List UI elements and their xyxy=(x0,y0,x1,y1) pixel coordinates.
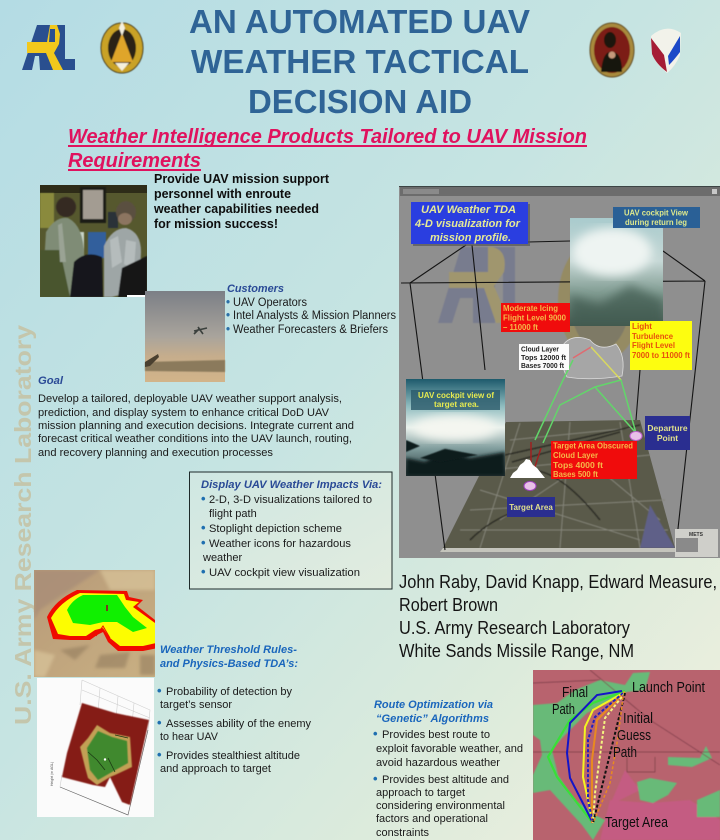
text block: goal xyxy=(38,375,354,459)
panel: display impacts: • xyxy=(201,491,206,506)
label: light turbulence xyxy=(630,321,692,370)
cloud marker xyxy=(561,337,623,379)
text block: route optimization: Route Optimization via xyxy=(374,699,493,711)
panel: display impacts: • xyxy=(201,535,206,550)
title: AN AUTOMATED UAV xyxy=(189,3,530,40)
text block: customers: Intel Analysts & Mission Planners xyxy=(233,310,396,322)
panel: display impacts: • xyxy=(201,564,206,579)
text block: customers: • xyxy=(226,324,230,336)
label: target area obscured: Bases 500 ft xyxy=(553,469,598,479)
text block: route optimization: Provides best route to xyxy=(382,729,490,741)
text block: threshold rules: and approach to target xyxy=(160,763,271,775)
wireframe xyxy=(401,241,705,550)
text block: route optimization: “Genetic” Algorithms xyxy=(376,713,489,725)
text block: route optimization: factors and operational xyxy=(376,813,488,825)
panel: display impacts: Display UAV Weather Impacts Via: xyxy=(201,479,382,491)
label: target area obscured xyxy=(551,440,637,479)
icon: ARL logo xyxy=(22,25,75,70)
text block: customers: • xyxy=(226,297,230,309)
icon: target cloud xyxy=(510,459,545,478)
title xyxy=(189,3,530,120)
label: target area: Target Area xyxy=(509,503,553,512)
inset: METS: METS xyxy=(689,532,704,538)
subtitle: Weather Intelligence Products Tailored to UAV Mission xyxy=(68,126,587,148)
text block: customers: Customers xyxy=(227,283,284,295)
photo: UAV in flight xyxy=(145,291,225,382)
photo: cockpit view of target area: target area. xyxy=(434,400,479,409)
inset: METS xyxy=(675,529,718,557)
text block: goal: prediction, and display system to enhance critical DoD UAV xyxy=(38,407,330,419)
icon: round seal xyxy=(590,23,634,77)
label: cloud layer: Cloud Layer xyxy=(521,344,559,354)
label: departure point xyxy=(630,416,690,450)
text: mission statement: for mission success! xyxy=(154,217,278,231)
label: cockpit return leg: UAV cockpit View xyxy=(624,208,689,218)
text block: threshold rules: target’s sensor xyxy=(160,699,232,711)
text block: goal: mission planning and execution decisions. Integrate current and xyxy=(38,420,354,432)
text: mission statement: weather capabilities needed xyxy=(153,202,319,216)
label: light turbulence: Turbulence xyxy=(632,332,673,341)
label: moderate icing: Moderate Icing xyxy=(503,304,558,313)
photo: cockpit view of target area xyxy=(406,379,505,476)
text block: goal: Goal xyxy=(38,375,64,387)
map: route optimization xyxy=(533,670,720,840)
text block: threshold rules xyxy=(157,644,311,775)
label: light turbulence: Flight Level xyxy=(632,341,675,350)
panel: display impacts: Weather icons for hazardous xyxy=(209,538,351,550)
text block: authors: White Sands Missile Range, NM xyxy=(399,641,634,661)
text block: goal: and recovery planning and execution processes xyxy=(38,447,273,459)
panel: display impacts: flight path xyxy=(209,508,257,520)
map labels: Launch Point xyxy=(632,679,706,696)
photo: operators at console xyxy=(40,185,147,297)
text block: customers xyxy=(226,283,396,336)
text block: authors: U.S. Army Research Laboratory xyxy=(399,618,630,638)
title bar xyxy=(400,187,720,196)
icon: shield patch xyxy=(651,29,681,73)
faded logo watermark xyxy=(438,238,642,362)
photo: cockpit view return leg xyxy=(570,218,663,326)
label: cloud layer: Tops 12000 ft xyxy=(521,353,566,362)
text block: goal: Develop a tailored, deployable UAV weather support analysis, xyxy=(38,393,342,405)
text block: threshold rules: • xyxy=(157,683,162,698)
text: mission statement: personnel with enroute xyxy=(154,187,291,201)
flight path xyxy=(531,347,636,475)
panel: display impacts: UAV cockpit view visualization xyxy=(209,567,360,579)
panel: display impacts: • xyxy=(201,520,206,535)
text block: threshold rules: and Physics-Based TDA’s: xyxy=(160,658,298,670)
text: mission statement xyxy=(153,172,330,231)
map labels: Path xyxy=(613,744,637,761)
text block: threshold rules: Assesses ability of the enemy xyxy=(166,718,311,730)
label: cloud layer: Bases 7000 ft xyxy=(521,361,564,370)
text block: threshold rules: Provides stealthiest altitude xyxy=(166,750,300,762)
label: UAV Weather TDA: 4-D visualization for xyxy=(414,218,521,230)
label: moderate icing: Flight Level 9000 xyxy=(503,314,566,322)
label: cloud layer xyxy=(519,344,569,370)
text: mission statement: Provide UAV mission support xyxy=(154,172,330,186)
panel: display impacts: 2-D, 3-D visualizations tailored to xyxy=(209,494,372,506)
map xyxy=(440,420,677,552)
panel: display impacts xyxy=(190,472,392,589)
text block: route optimization: exploit favorable weather, and xyxy=(376,743,523,755)
text block: route optimization: • xyxy=(373,771,378,786)
label: moderate icing: – 11000 ft xyxy=(503,323,538,332)
text block: route optimization: • xyxy=(373,726,378,741)
photo: cockpit view of target area: UAV cockpit view of xyxy=(418,391,494,400)
label: cockpit return leg xyxy=(613,207,700,228)
label: UAV Weather TDA xyxy=(411,202,530,246)
subtitle: Requirements xyxy=(68,150,201,172)
map labels: Initial xyxy=(623,710,653,727)
label: light turbulence: 7000 to 11000 ft xyxy=(632,351,690,360)
label: cockpit return leg: during return leg xyxy=(625,218,687,227)
map labels xyxy=(552,679,706,831)
text block: threshold rules: • xyxy=(157,747,162,762)
label: target area xyxy=(507,482,555,517)
chart: 3D terrain plot xyxy=(37,678,154,817)
vertical watermark: U.S. Army Research Laboratory: U.S. Army Research Laboratory xyxy=(10,325,36,725)
label: UAV Weather TDA: mission profile. xyxy=(430,232,511,244)
map labels: Target Area xyxy=(605,814,669,831)
title: DECISION AID xyxy=(248,83,472,120)
text block: route optimization: approach to target xyxy=(376,787,465,799)
text block: customers: • xyxy=(226,310,230,322)
title: WEATHER TACTICAL xyxy=(191,43,529,80)
text block: route optimization: constraints xyxy=(376,827,429,839)
text block: goal: forecast critical weather conditions into the UAV launch, routing, xyxy=(38,433,352,445)
map labels: Final xyxy=(562,684,588,701)
panel: display impacts: Stoplight depiction scheme xyxy=(209,523,342,535)
label: departure point: Departure xyxy=(647,423,688,433)
label: target area obscured: Target Area Obscured xyxy=(553,440,633,450)
label: target area obscured: Cloud Layer xyxy=(553,450,599,460)
text block: threshold rules: Probability of detection by xyxy=(166,686,292,698)
panel: display impacts: weather xyxy=(202,552,242,564)
text block: threshold rules: to hear UAV xyxy=(160,731,219,743)
text block: route optimization: avoid hazardous weather xyxy=(376,757,500,769)
panel: 4-D visualization xyxy=(399,186,720,558)
text block: authors: Robert Brown xyxy=(399,595,498,615)
label: moderate icing xyxy=(501,303,570,332)
map labels: Path xyxy=(552,701,575,718)
route lines xyxy=(548,691,625,823)
icon: White Sands crest xyxy=(101,21,143,73)
chart: 3D terrain plot: Height (m AGL) xyxy=(50,762,54,786)
text block: route optimization: considering environmental xyxy=(376,800,505,812)
label: UAV Weather TDA: UAV Weather TDA xyxy=(421,204,516,216)
map labels: Guess xyxy=(617,727,651,744)
label: departure point: Point xyxy=(657,433,678,443)
text block: route optimization: Provides best altitude and xyxy=(382,774,509,786)
text block: customers: Weather Forecasters & Briefers xyxy=(233,324,388,336)
text block: authors xyxy=(399,572,717,661)
text block: customers: UAV Operators xyxy=(233,297,307,309)
subtitle xyxy=(68,126,587,172)
map: threat stoplight xyxy=(34,570,158,677)
text block: route optimization xyxy=(373,699,523,839)
label: target area obscured: Tops 4000 ft xyxy=(553,460,603,470)
label: light turbulence: Light xyxy=(632,322,652,331)
text block: threshold rules: Weather Threshold Rules- xyxy=(160,644,297,656)
text block: threshold rules: • xyxy=(157,715,162,730)
